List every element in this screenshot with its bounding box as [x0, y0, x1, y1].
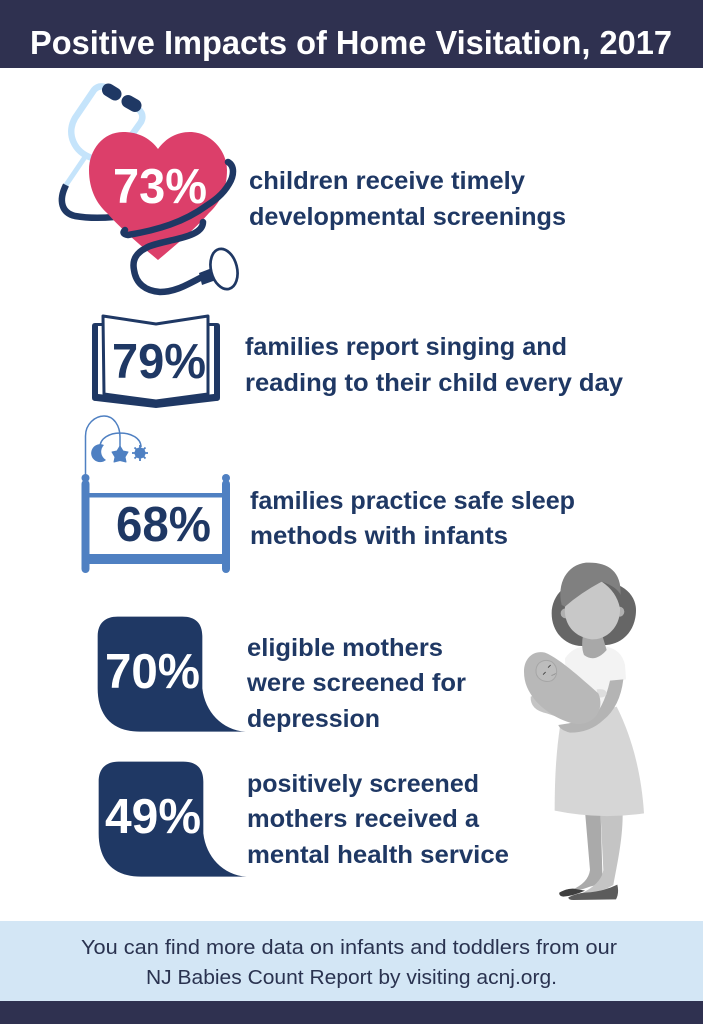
- description: [245, 333, 623, 397]
- icon: open book: [92, 316, 220, 408]
- percent 79: 79%: [112, 335, 206, 389]
- footer callout: You can find more data on infants and toddlers from our: [81, 937, 617, 959]
- description: reading to their child every day: [245, 369, 623, 397]
- bottom bar: [0, 1001, 703, 1024]
- description: eligible mothers: [247, 634, 443, 662]
- description: [249, 167, 566, 231]
- header banner: [0, 0, 703, 68]
- stat: depression screening: [98, 617, 466, 733]
- callout badge 49: 49%: [105, 790, 201, 844]
- icon: crib with mobile: [82, 416, 230, 573]
- description: mothers received a: [247, 805, 480, 833]
- description: children receive timely: [249, 167, 525, 195]
- footer callout: [0, 921, 703, 1001]
- illustration: mother holding baby: [524, 563, 644, 900]
- stat: mental health service: [99, 762, 509, 877]
- percent 73: 73%: [113, 160, 207, 214]
- callout badge 70: [98, 617, 246, 732]
- callout badge 49: [99, 762, 247, 877]
- description: depression: [247, 705, 380, 733]
- description: [247, 770, 509, 869]
- description: [246, 634, 466, 733]
- description: mental health service: [247, 841, 509, 869]
- stat: developmental screenings: [62, 86, 566, 292]
- icon: heart with stethoscope: [62, 86, 242, 292]
- stat: singing and reading: [92, 316, 623, 408]
- stat: safe sleep: [82, 416, 575, 573]
- description: positively screened: [247, 770, 479, 798]
- description: were screened for: [246, 669, 466, 697]
- callout badge 70: 70%: [105, 645, 200, 699]
- description: families practice safe sleep: [250, 487, 575, 515]
- description: methods with infants: [250, 522, 508, 550]
- title: Positive Impacts of Home Visitation, 2017: [30, 24, 672, 61]
- description: developmental screenings: [249, 203, 566, 231]
- description: [250, 487, 575, 550]
- description: families report singing and: [245, 333, 567, 361]
- footer callout: NJ Babies Count Report by visiting acnj.org.: [146, 967, 557, 989]
- percent 68: 68%: [116, 498, 211, 552]
